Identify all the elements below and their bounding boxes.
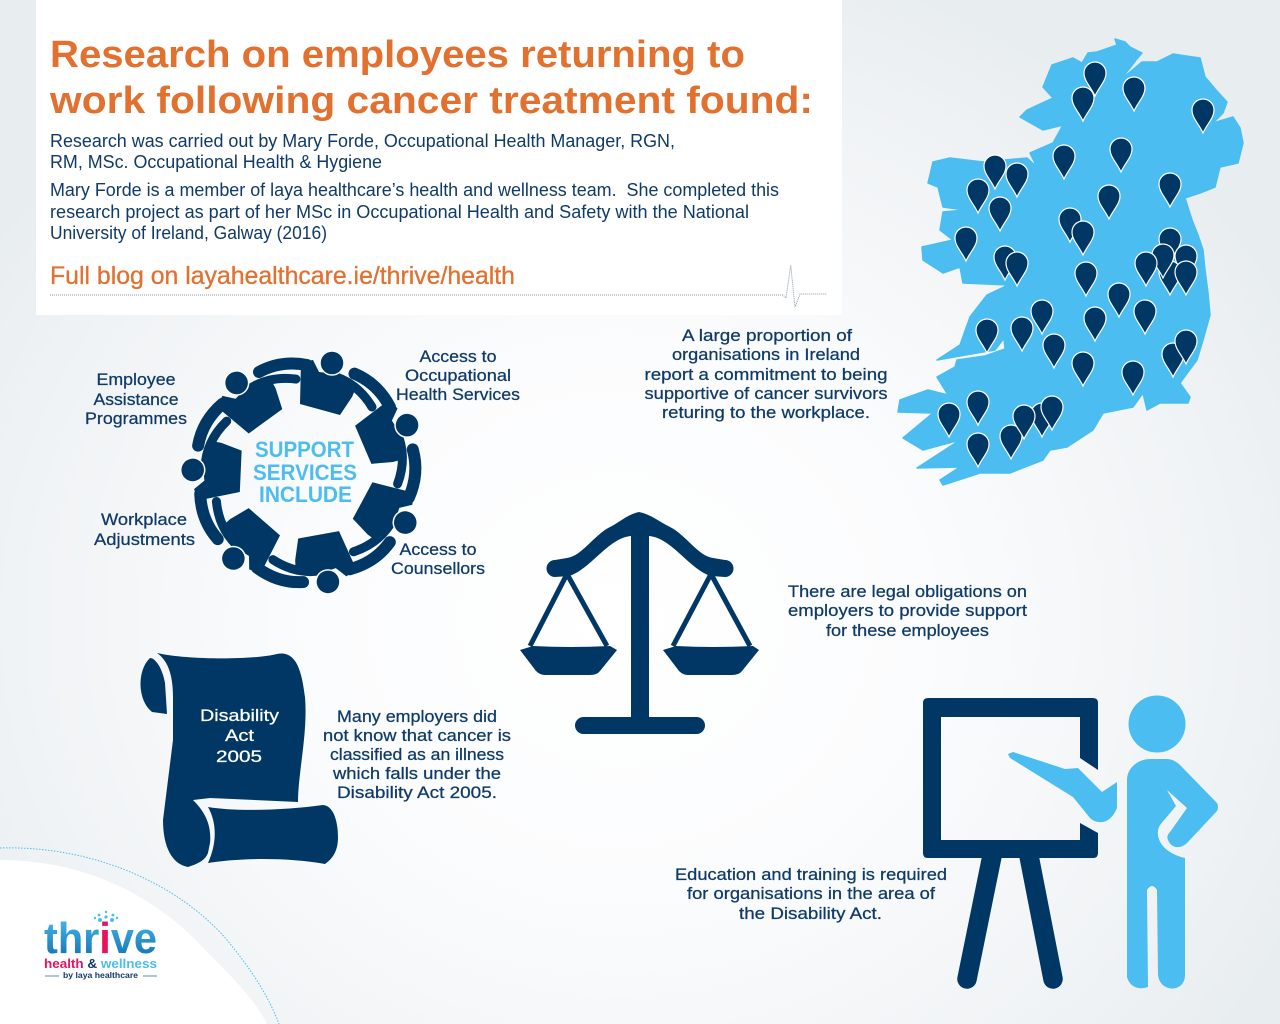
text block: disability act xyxy=(323,708,511,802)
icon: teacher at board xyxy=(923,696,1218,988)
text block: disability act: Disability Act 2005. xyxy=(337,784,497,802)
text block: legal obligations: There are legal obligations on xyxy=(788,583,1027,601)
scroll label: 2005 xyxy=(216,747,262,766)
text block: organisations: organisations in Ireland xyxy=(672,346,860,364)
footer logo panel xyxy=(0,848,279,1024)
text block: researcher xyxy=(50,131,675,172)
scroll label: Act xyxy=(225,726,254,745)
label: occupational health xyxy=(396,348,520,404)
icon: scroll xyxy=(140,653,338,867)
map of Ireland with pins xyxy=(898,39,1243,485)
label: counsellors: Access to xyxy=(400,541,476,559)
text block: project xyxy=(50,180,779,243)
map pins xyxy=(938,62,1214,467)
logo: thrive xyxy=(44,911,157,980)
text block: disability act: not know that cancer is xyxy=(323,727,511,745)
title: Research on employees returning to xyxy=(50,34,745,76)
title: work following cancer treatment found: xyxy=(49,80,813,122)
label: workplace adjustments: Adjustments xyxy=(94,531,195,549)
label: occupational health: Access to xyxy=(420,348,496,366)
heading: support services: SUPPORT xyxy=(255,437,355,462)
logo: thrive: health & wellness xyxy=(44,956,157,971)
label: occupational health: Occupational xyxy=(405,367,511,385)
blog link: Full blog on layahealthcare.ie/thrive/health xyxy=(50,262,515,290)
text block: project: University of Ireland, Galway (2016) xyxy=(50,223,327,243)
text block: disability act: classified as an illness xyxy=(330,746,504,764)
icon: scales xyxy=(520,512,759,734)
text block: project: research project as part of her MSc in Occupational Health and Safety with the National xyxy=(50,202,749,222)
text block: organisations: A large proportion of xyxy=(682,327,852,345)
text block: legal obligations: employers to provide support xyxy=(788,602,1027,620)
text block: project: Mary Forde is a member of laya healthcare’s health and wellness team. She completed this xyxy=(50,180,779,200)
text block: organisations xyxy=(644,327,888,422)
text block: education: the Disability Act. xyxy=(739,905,882,923)
text block: organisations: supportive of cancer survivors xyxy=(644,385,888,403)
label: workplace adjustments: Workplace xyxy=(101,511,187,529)
diagram: circle of people xyxy=(172,344,441,610)
text block: legal obligations: for these employees xyxy=(826,622,989,640)
title xyxy=(49,34,813,122)
text block: disability act: Many employers did xyxy=(337,708,497,726)
label: workplace adjustments xyxy=(94,511,195,549)
label: employee assistance xyxy=(85,371,187,428)
text block: researcher: Research was carried out by Mary Forde, Occupational Health Manager, RGN, xyxy=(50,131,675,151)
map outline xyxy=(898,39,1243,485)
scroll label xyxy=(200,706,280,766)
label: employee assistance: Programmes xyxy=(85,410,187,428)
logo: thrive: thrive xyxy=(44,914,157,963)
text block: organisations: report a commitment to being xyxy=(644,366,888,384)
heading: support services: INCLUDE xyxy=(259,482,352,507)
text block: education: for organisations in the area of xyxy=(687,885,935,903)
heading: support services xyxy=(253,437,357,507)
text block: education xyxy=(675,866,947,923)
text block: education: Education and training is required xyxy=(675,866,947,884)
panel: header xyxy=(36,0,842,315)
logo dots xyxy=(94,911,118,922)
label: occupational health: Health Services xyxy=(396,386,520,404)
label: counsellors xyxy=(391,541,485,578)
scroll label: Disability xyxy=(200,706,280,725)
heading: support services: SERVICES xyxy=(253,460,357,485)
text block: legal obligations xyxy=(788,583,1027,640)
logo: thrive: by laya healthcare xyxy=(63,970,138,980)
text block: disability act: which falls under the xyxy=(332,765,501,783)
text block: researcher: RM, MSc. Occupational Health & Hygiene xyxy=(50,152,382,172)
label: counsellors: Counsellors xyxy=(391,560,485,578)
label: employee assistance: Employee xyxy=(96,371,176,389)
label: employee assistance: Assistance xyxy=(94,391,178,409)
text block: organisations: returing to the workplace. xyxy=(662,404,870,422)
